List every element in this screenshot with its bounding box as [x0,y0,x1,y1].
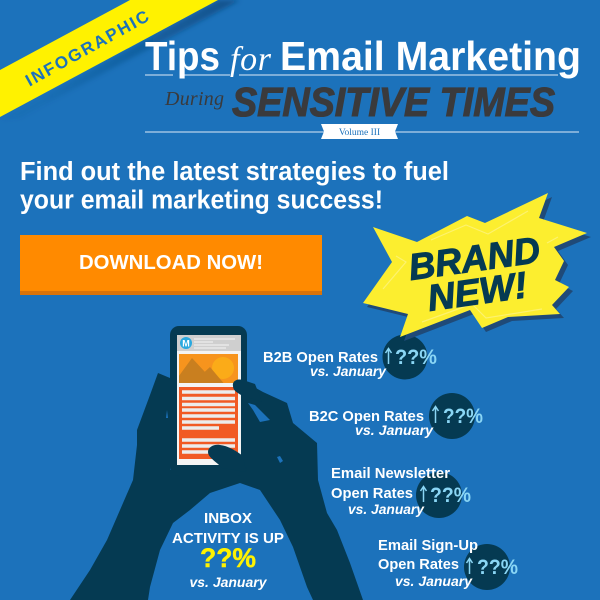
stat: email sign-up open rates: Email Sign-Up [378,537,478,554]
stat: inbox activity [172,510,284,590]
stat circle: B2C [429,393,475,439]
stat: B2B open rates: ??% [395,346,437,369]
illustration: hands holding phone [70,326,363,600]
stat: B2C open rates: ??% [443,405,483,428]
stat: B2C open rates [309,405,483,438]
stat: email sign-up open rates [378,537,518,589]
stat: email newsletter open rates: ??% [430,484,471,507]
phone screen [176,335,241,465]
title word: for: for [230,41,272,78]
subtitle: Sensitive Times: SENSITIVE TIMES [232,79,555,125]
title block [145,33,581,139]
badge text: new: NEW! [425,264,530,319]
finger: lower [208,445,246,472]
stat: email sign-up open rates: ??% [477,556,518,579]
stat circle: newsletter [416,472,462,518]
headline text: Find out the latest strategies to fuel [20,158,449,186]
app avatar: M [182,338,190,348]
title words: Email Marketing: Email Marketing [280,33,581,79]
stat: email sign-up open rates: Open Rates [378,556,459,573]
stat: B2B open rates [263,346,437,379]
starburst badge [363,193,591,341]
stat: email newsletter open rates: Email Newsletter [331,465,450,482]
download button: DOWNLOAD NOW! [79,252,263,274]
stat: B2B open rates: vs. January [310,363,387,379]
hands and arms silhouette [70,373,363,600]
stat: email newsletter open rates: vs. January [348,501,425,517]
download button [20,235,322,295]
phone body [170,326,247,476]
email hero image [179,354,238,383]
stat: B2C open rates: vs. January [355,422,434,438]
subtitle: During: During [164,88,224,110]
headline text [20,158,449,214]
volume banner: Volume III [339,128,380,138]
stat: inbox activity: ACTIVITY IS UP [172,530,284,547]
stat: inbox activity: ??% [200,543,256,573]
stat circle: sign-up [464,544,510,590]
email body block [179,387,238,459]
stat: B2C open rates: B2C Open Rates [309,408,424,425]
headline text: your email marketing success! [20,186,383,214]
stat: B2B open rates: B2B Open Rates [263,349,378,366]
stat: inbox activity: INBOX [204,510,252,527]
stat: email newsletter open rates: Open Rates [331,485,413,502]
finger: upper [233,379,262,402]
ribbon: infographic [0,0,240,120]
volume banner [321,124,398,139]
ribbon label: INFOGRAPHIC [22,7,152,90]
badge text: brand: BRAND [406,229,542,288]
title word: Tips: Tips [145,33,220,79]
stat: inbox activity: vs. January [190,574,268,590]
stat: email newsletter open rates [331,465,471,517]
stat: email sign-up open rates: vs. January [395,573,473,589]
stat circle: B2B [382,334,428,380]
